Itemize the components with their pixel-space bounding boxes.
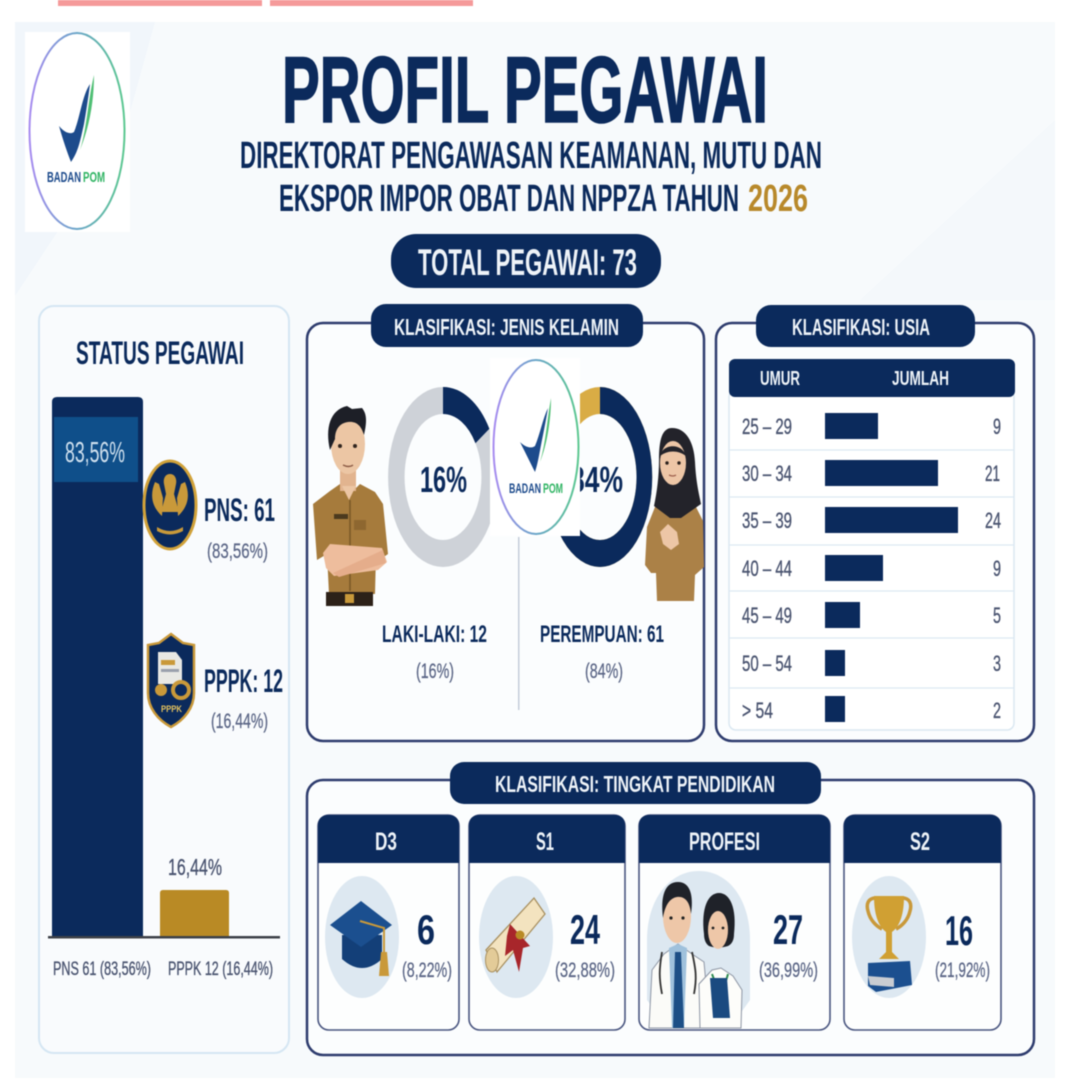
PNS label xyxy=(204,492,275,563)
card: S2: 16 xyxy=(945,907,973,954)
panel: tingkat pendidikan xyxy=(307,762,1034,1055)
card: S2: S2 xyxy=(910,828,930,856)
row 40-44 xyxy=(742,555,1001,581)
PNS label: (83,56%) xyxy=(207,540,268,563)
row >54: > 54 xyxy=(742,698,773,723)
table header: UMUR xyxy=(760,368,800,390)
logo: Badan POM watermark xyxy=(490,358,580,536)
title: PROFIL PEGAWAI xyxy=(282,37,768,142)
card: S1 xyxy=(469,815,625,1030)
row 30-34 xyxy=(742,460,1000,486)
chart: donut laki-laki xyxy=(396,400,490,554)
row 35-39: 24 xyxy=(985,508,1001,533)
row 25-29: 25 – 29 xyxy=(742,414,792,439)
table: usia xyxy=(729,359,1015,730)
row 45-49: 45 – 49 xyxy=(742,603,792,628)
chart: donut laki-laki: 16% xyxy=(420,459,467,500)
icon: PNS medal xyxy=(144,461,196,549)
PPPK label: PPPK: 12 xyxy=(204,663,283,699)
divider xyxy=(518,537,520,710)
chart axis and labels: PPPK 12 (16,44%) xyxy=(168,959,273,980)
icon: PPPK shield xyxy=(148,634,194,727)
bar: PPPK xyxy=(160,854,229,936)
panel heading: usia xyxy=(756,305,975,347)
card: S2: (21,92%) xyxy=(935,959,990,982)
total pegawai pill: TOTAL PEGAWAI: 73 xyxy=(418,242,637,283)
row 35-39: 35 – 39 xyxy=(742,508,792,533)
row 45-49 xyxy=(742,602,1001,628)
row 30-34: 30 – 34 xyxy=(742,461,792,486)
row 25-29 xyxy=(742,413,1001,439)
panel heading: pendidikan: KLASIFIKASI: TINGKAT PENDIDIKAN xyxy=(495,771,775,797)
label: laki-laki xyxy=(382,621,487,683)
icon: graduation cap xyxy=(330,901,392,976)
card: S2 xyxy=(844,815,1001,1030)
row 30-34: 21 xyxy=(985,461,1000,486)
table header xyxy=(729,359,1015,397)
logo: Badan POM header xyxy=(25,32,130,232)
row 25-29: 9 xyxy=(993,414,1001,439)
chart axis and labels: PNS 61 (83,56%) xyxy=(53,959,151,980)
row 50-54: 50 – 54 xyxy=(742,651,792,676)
card: profesi: PROFESI xyxy=(689,828,760,856)
card: profesi: 27 xyxy=(773,906,803,953)
title: 2026 xyxy=(748,178,808,220)
card: S1: 24 xyxy=(570,906,600,953)
label: laki-laki: LAKI-LAKI: 12 xyxy=(382,621,487,648)
top edge strip xyxy=(58,0,473,6)
row 50-54: 3 xyxy=(993,651,1001,676)
row 40-44: 40 – 44 xyxy=(742,556,792,581)
logo: Badan POM header: POM xyxy=(83,169,105,186)
panel heading: pendidikan xyxy=(450,762,821,804)
card: D3 xyxy=(318,815,459,1030)
chart axis and labels xyxy=(48,936,280,980)
bar: PNS: 83,56% xyxy=(65,437,125,469)
logo: Badan POM watermark: BADAN xyxy=(509,480,541,496)
title xyxy=(240,37,822,220)
card: D3: 6 xyxy=(417,906,435,953)
chart: donut perempuan xyxy=(556,400,644,554)
label: perempuan: PEREMPUAN: 61 xyxy=(540,621,664,648)
heading: status pegawai: STATUS PEGAWAI xyxy=(76,335,244,371)
panel heading: jenis kelamin xyxy=(371,304,643,347)
icon: trophy xyxy=(867,896,912,992)
card: D3: D3 xyxy=(375,828,397,856)
logo: Badan POM header: BADAN xyxy=(47,169,81,186)
icon: PPPK shield: PPPK xyxy=(161,704,182,714)
panel: jenis kelamin xyxy=(307,304,704,741)
card: D3: (8,22%) xyxy=(402,959,452,982)
bar: PNS xyxy=(52,397,143,936)
label: perempuan: (84%) xyxy=(585,660,623,683)
panel: usia xyxy=(716,305,1034,741)
row 35-39 xyxy=(742,507,1001,533)
PPPK label: (16,44%) xyxy=(211,710,268,733)
bar: PPPK: 16,44% xyxy=(168,854,222,880)
card: profesi xyxy=(639,815,830,1030)
card: S1: S1 xyxy=(536,828,554,856)
card: S1: (32,88%) xyxy=(555,959,615,982)
PPPK label xyxy=(204,663,283,733)
panel heading: usia: KLASIFIKASI: USIA xyxy=(792,314,930,340)
row 50-54 xyxy=(742,650,1001,676)
panel heading: jenis kelamin: KLASIFIKASI: JENIS KELAMIN xyxy=(394,314,619,340)
PNS label: PNS: 61 xyxy=(204,492,275,528)
row >54: 2 xyxy=(993,698,1001,723)
title: EKSPOR IMPOR OBAT DAN NPPZA TAHUN xyxy=(279,178,739,220)
card: profesi: (36,99%) xyxy=(759,959,818,982)
label: laki-laki: (16%) xyxy=(416,660,454,683)
panel: status pegawai xyxy=(39,306,289,1053)
row 40-44: 9 xyxy=(993,556,1001,581)
row 45-49: 5 xyxy=(993,603,1001,628)
total pegawai pill xyxy=(391,234,661,288)
illustration: female employee xyxy=(645,428,704,601)
logo: Badan POM watermark: POM xyxy=(543,480,563,496)
illustration: male employee xyxy=(313,406,388,606)
illustration: doctors xyxy=(649,882,742,1028)
chart: donut perempuan: 84% xyxy=(570,459,623,500)
table header: JUMLAH xyxy=(892,368,949,390)
icon: diploma xyxy=(486,898,545,972)
label: perempuan xyxy=(540,621,664,683)
row >54 xyxy=(742,696,1001,723)
